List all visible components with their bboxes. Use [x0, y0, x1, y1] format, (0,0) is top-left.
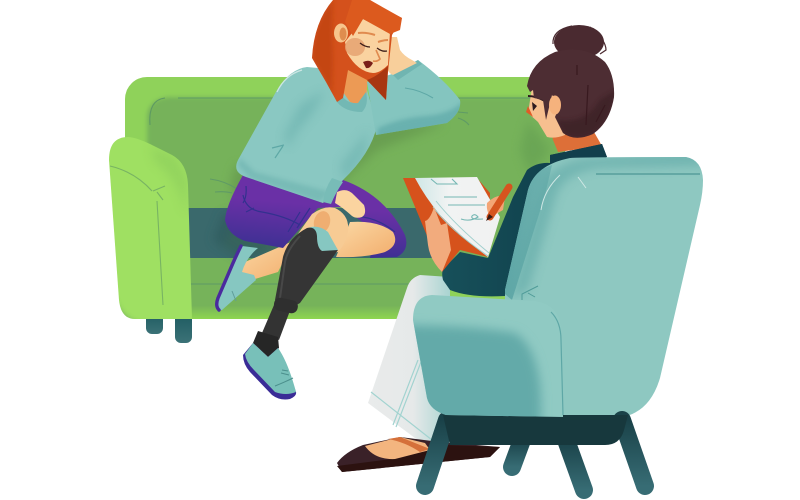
sofa seat gap [187, 208, 447, 258]
therapist [337, 25, 706, 490]
armchair arm [413, 286, 564, 417]
liner [308, 227, 338, 253]
jacket [442, 144, 607, 296]
hand behind head [387, 37, 417, 75]
woman on sofa [210, 0, 469, 400]
hair fringe [345, 0, 402, 36]
clipboard [403, 177, 500, 272]
armchair base [443, 415, 628, 445]
paper [415, 177, 500, 257]
sofa seat cushion front [187, 258, 450, 319]
armchair legs [425, 420, 645, 490]
sweater arm [367, 60, 463, 140]
collar [273, 297, 299, 314]
collar [337, 92, 367, 112]
right thigh [336, 222, 395, 257]
ear [549, 96, 561, 114]
neck [338, 65, 368, 104]
face [334, 19, 390, 73]
prosthetic shoe [243, 343, 296, 400]
sweater torso [236, 67, 377, 204]
hair back [312, 0, 402, 102]
hair bun [553, 25, 606, 59]
armchair back [500, 150, 706, 417]
sofa [109, 77, 570, 343]
cheek [345, 38, 365, 56]
pylon [262, 305, 291, 340]
neck [550, 125, 602, 152]
ear [334, 24, 348, 42]
sofa armrest [109, 137, 192, 325]
soft shadow on sofa [225, 122, 445, 255]
mouth [363, 61, 373, 68]
shadow of therapist on sofa [520, 120, 550, 175]
skirt [225, 175, 406, 258]
hand on knee [335, 190, 365, 218]
hair right strand [367, 66, 388, 100]
sofa creases [210, 112, 469, 193]
nose [373, 50, 380, 61]
prosthetic leg [253, 227, 338, 357]
face [526, 85, 565, 138]
illustration: therapy session [109, 0, 703, 499]
socket [275, 228, 338, 307]
trousers [368, 275, 450, 447]
flat shoe [337, 437, 500, 472]
knee [283, 207, 348, 262]
cuff [323, 178, 343, 204]
sofa back [125, 77, 570, 319]
hand with pen [486, 187, 509, 221]
ankle [253, 331, 279, 357]
hair [527, 50, 616, 138]
knee highlight [311, 209, 333, 235]
trouser creases [371, 360, 432, 440]
brows and eyes [358, 33, 388, 42]
sofa feet [146, 312, 192, 343]
back leg and sock [217, 238, 300, 310]
hand holding clipboard [425, 207, 451, 272]
